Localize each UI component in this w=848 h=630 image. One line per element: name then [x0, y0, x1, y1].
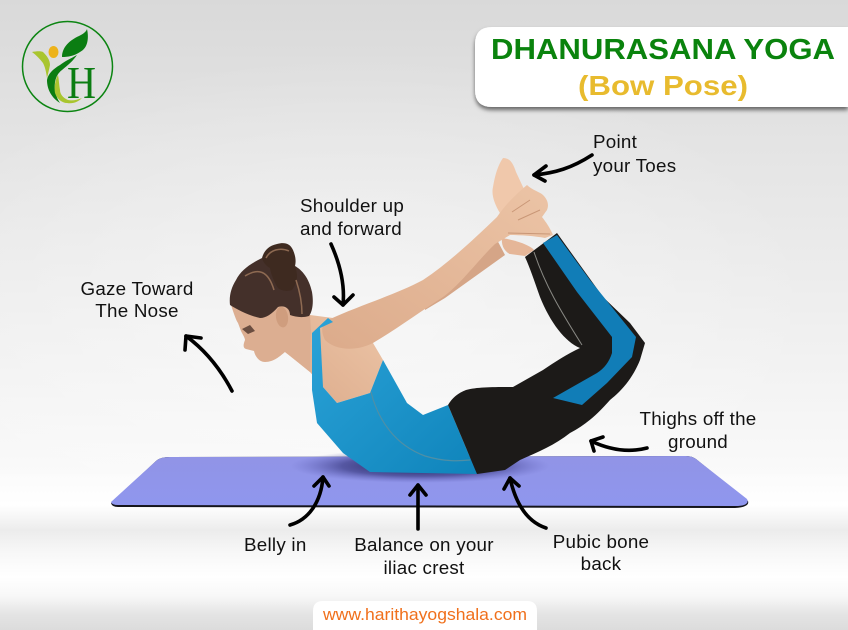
icon: sun head — [48, 46, 58, 58]
arrow: shoulder — [331, 244, 353, 305]
arrow: toes — [534, 155, 592, 181]
logo letter H: H — [67, 57, 96, 108]
far arm — [425, 236, 505, 310]
label: balance: iliac crest — [383, 557, 465, 578]
woman in bow pose — [230, 158, 645, 474]
website pill — [313, 601, 537, 630]
arm and shoulder — [322, 185, 553, 349]
legging seam — [534, 252, 582, 345]
arrow: balance — [410, 485, 426, 529]
label: shoulder: and forward — [300, 218, 402, 239]
icon: yellow-green figure arm — [32, 51, 50, 78]
icon: lime swoosh — [55, 75, 82, 103]
hair highlights — [245, 249, 302, 314]
label: balance: Balance on your — [354, 534, 494, 555]
website url: www.harithayogshala.com — [322, 606, 527, 624]
title panel — [475, 27, 848, 107]
label: pubic bone: Pubic bone — [553, 531, 649, 552]
eye — [242, 325, 255, 334]
label: thighs: ground — [668, 431, 728, 452]
subheading: (Bow Pose) — [578, 70, 748, 101]
heading: DHANURASANA YOGA — [491, 34, 835, 66]
far foot and toes — [492, 158, 527, 218]
hair bun — [262, 243, 297, 291]
heel — [502, 238, 534, 256]
blue top — [312, 318, 477, 474]
icon: green leaf — [62, 29, 88, 57]
neck and back — [285, 315, 383, 403]
hair — [230, 258, 313, 318]
label: belly: Belly in — [244, 534, 307, 555]
logo — [22, 22, 112, 112]
icon: green stem — [47, 55, 77, 103]
arrow: gaze — [185, 336, 232, 391]
label: gaze: The Nose — [95, 300, 179, 321]
label: shoulder: Shoulder up — [300, 195, 404, 216]
face — [231, 300, 311, 372]
label: pubic bone: back — [581, 553, 622, 574]
arrow: belly — [290, 477, 329, 525]
top seam — [371, 392, 470, 461]
black leggings — [448, 233, 645, 474]
label: toes: your Toes — [593, 155, 676, 176]
fingers — [508, 200, 550, 234]
label: toes: Point — [593, 131, 638, 152]
blue legging stripe — [543, 235, 636, 405]
yoga mat — [111, 449, 748, 508]
ear — [275, 306, 289, 328]
label: gaze: Gaze Toward — [80, 278, 194, 299]
arrow: pubic bone — [504, 478, 546, 528]
label: thighs: Thighs off the — [640, 408, 756, 429]
arrow: thighs — [591, 437, 647, 451]
